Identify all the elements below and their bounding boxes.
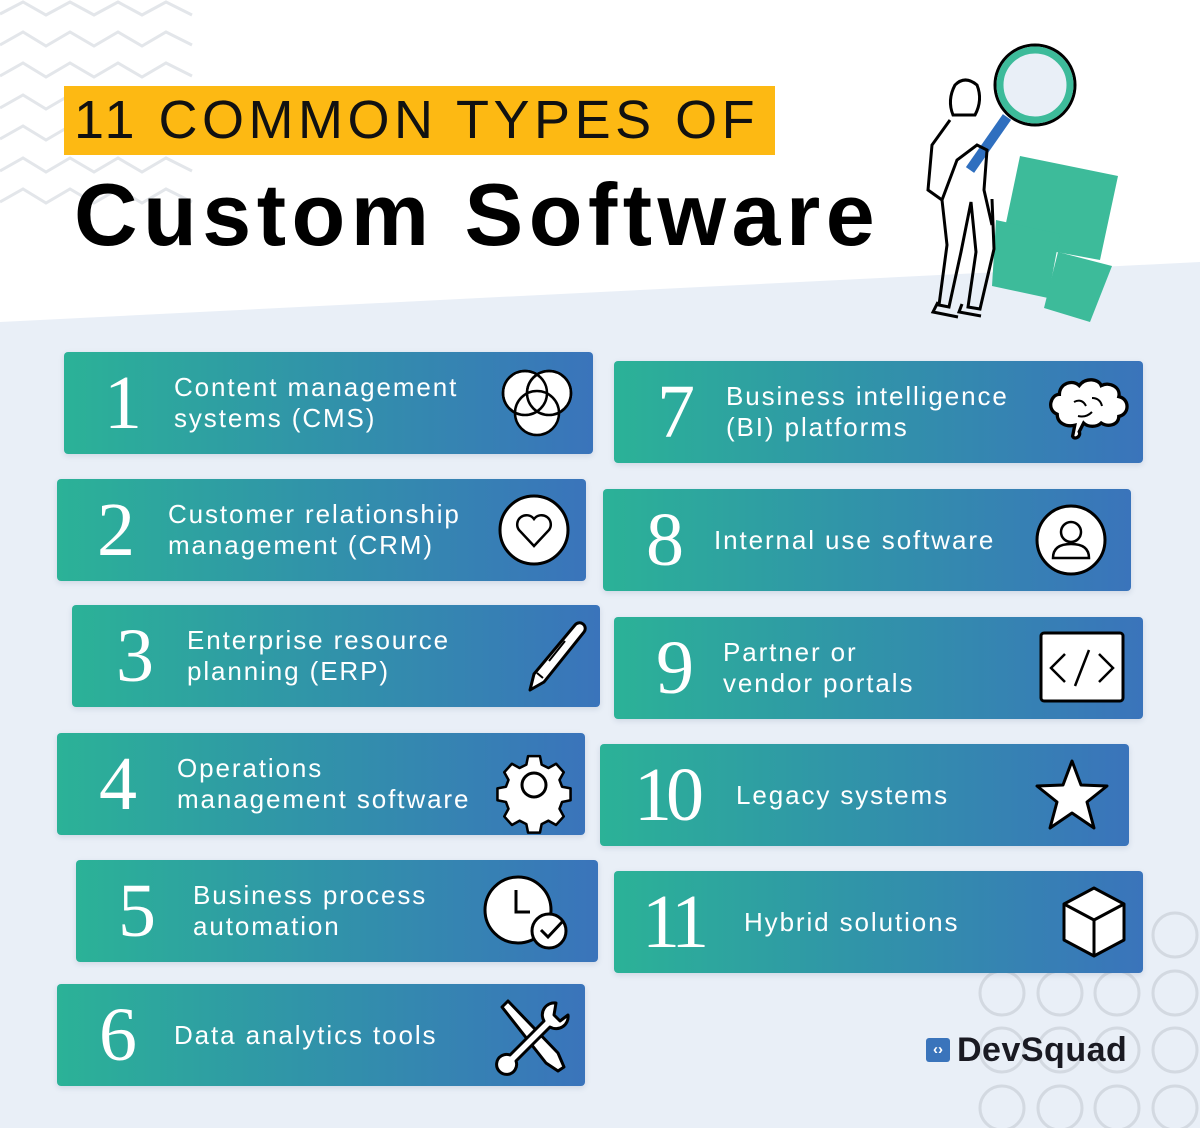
icon: gear <box>496 754 572 834</box>
text 1: systems (CMS) <box>174 403 376 433</box>
logo text: DevSquad <box>957 1030 1127 1068</box>
icon: logo mark <box>926 1038 950 1062</box>
number 8: 8 <box>646 498 684 582</box>
text 8: Internal use software <box>714 524 995 554</box>
text 7: (BI) platforms <box>726 412 909 442</box>
illustration: woman with magnifier and puzzle <box>926 44 1118 322</box>
text 6: Data analytics tools <box>174 1020 437 1050</box>
text 3: planning (ERP) <box>187 656 390 686</box>
icon: heart <box>498 494 570 566</box>
card 8 <box>603 489 1131 591</box>
text 5 <box>193 880 427 941</box>
number 1: 1 <box>104 361 142 445</box>
text 1: Content management <box>174 372 458 402</box>
title: main heading: Custom Software <box>74 165 880 264</box>
icon: star <box>1035 760 1108 830</box>
card 4 <box>57 733 585 835</box>
icon: venn <box>502 370 572 436</box>
title: subtitle banner: 11 COMMON TYPES OF <box>74 90 759 150</box>
text 9: Partner or <box>723 637 858 667</box>
card 11 <box>614 871 1143 973</box>
text 9 <box>723 637 914 698</box>
number 2: 2 <box>97 488 135 572</box>
number 11: 11 <box>642 880 703 964</box>
icon: clock check <box>484 876 568 950</box>
text 4: Operations <box>177 753 323 783</box>
number 5: 5 <box>118 869 156 953</box>
number 7: 7 <box>657 370 695 454</box>
icon: pencil <box>528 621 587 692</box>
icon: cube <box>1062 886 1126 958</box>
number 10: 10 <box>634 753 698 837</box>
text 5: Business process <box>193 880 427 910</box>
text 2: management (CRM) <box>168 530 434 560</box>
number 9: 9 <box>656 626 694 710</box>
icon: logo mark: ‹› <box>933 1041 943 1058</box>
number 4: 4 <box>99 742 137 826</box>
icon: tools <box>495 999 570 1076</box>
card 9 <box>614 617 1143 719</box>
card 2 <box>57 479 586 581</box>
text 4 <box>177 753 470 814</box>
card 7 <box>614 361 1143 463</box>
text 9: vendor portals <box>723 668 914 698</box>
text 3 <box>187 625 450 686</box>
card 6 <box>57 984 585 1086</box>
card 10 <box>600 744 1129 846</box>
card 5 <box>76 860 598 962</box>
card 1 <box>64 352 593 454</box>
text 7: Business intelligence <box>726 381 1009 411</box>
icon: brain <box>1049 378 1129 440</box>
text 1 <box>174 372 458 433</box>
number 6: 6 <box>99 993 137 1077</box>
text 4: management software <box>177 784 470 814</box>
number 3: 3 <box>116 614 154 698</box>
text 10: Legacy systems <box>736 780 949 810</box>
icon: code <box>1040 632 1124 702</box>
text 7 <box>726 381 1009 442</box>
text 5: automation <box>193 911 341 941</box>
text 11: Hybrid solutions <box>744 906 959 936</box>
icon: person <box>1036 504 1106 576</box>
card 3 <box>72 605 600 707</box>
text 3: Enterprise resource <box>187 625 450 655</box>
logo: DevSquad <box>926 1030 1127 1068</box>
text 2 <box>168 499 461 560</box>
text 2: Customer relationship <box>168 499 461 529</box>
